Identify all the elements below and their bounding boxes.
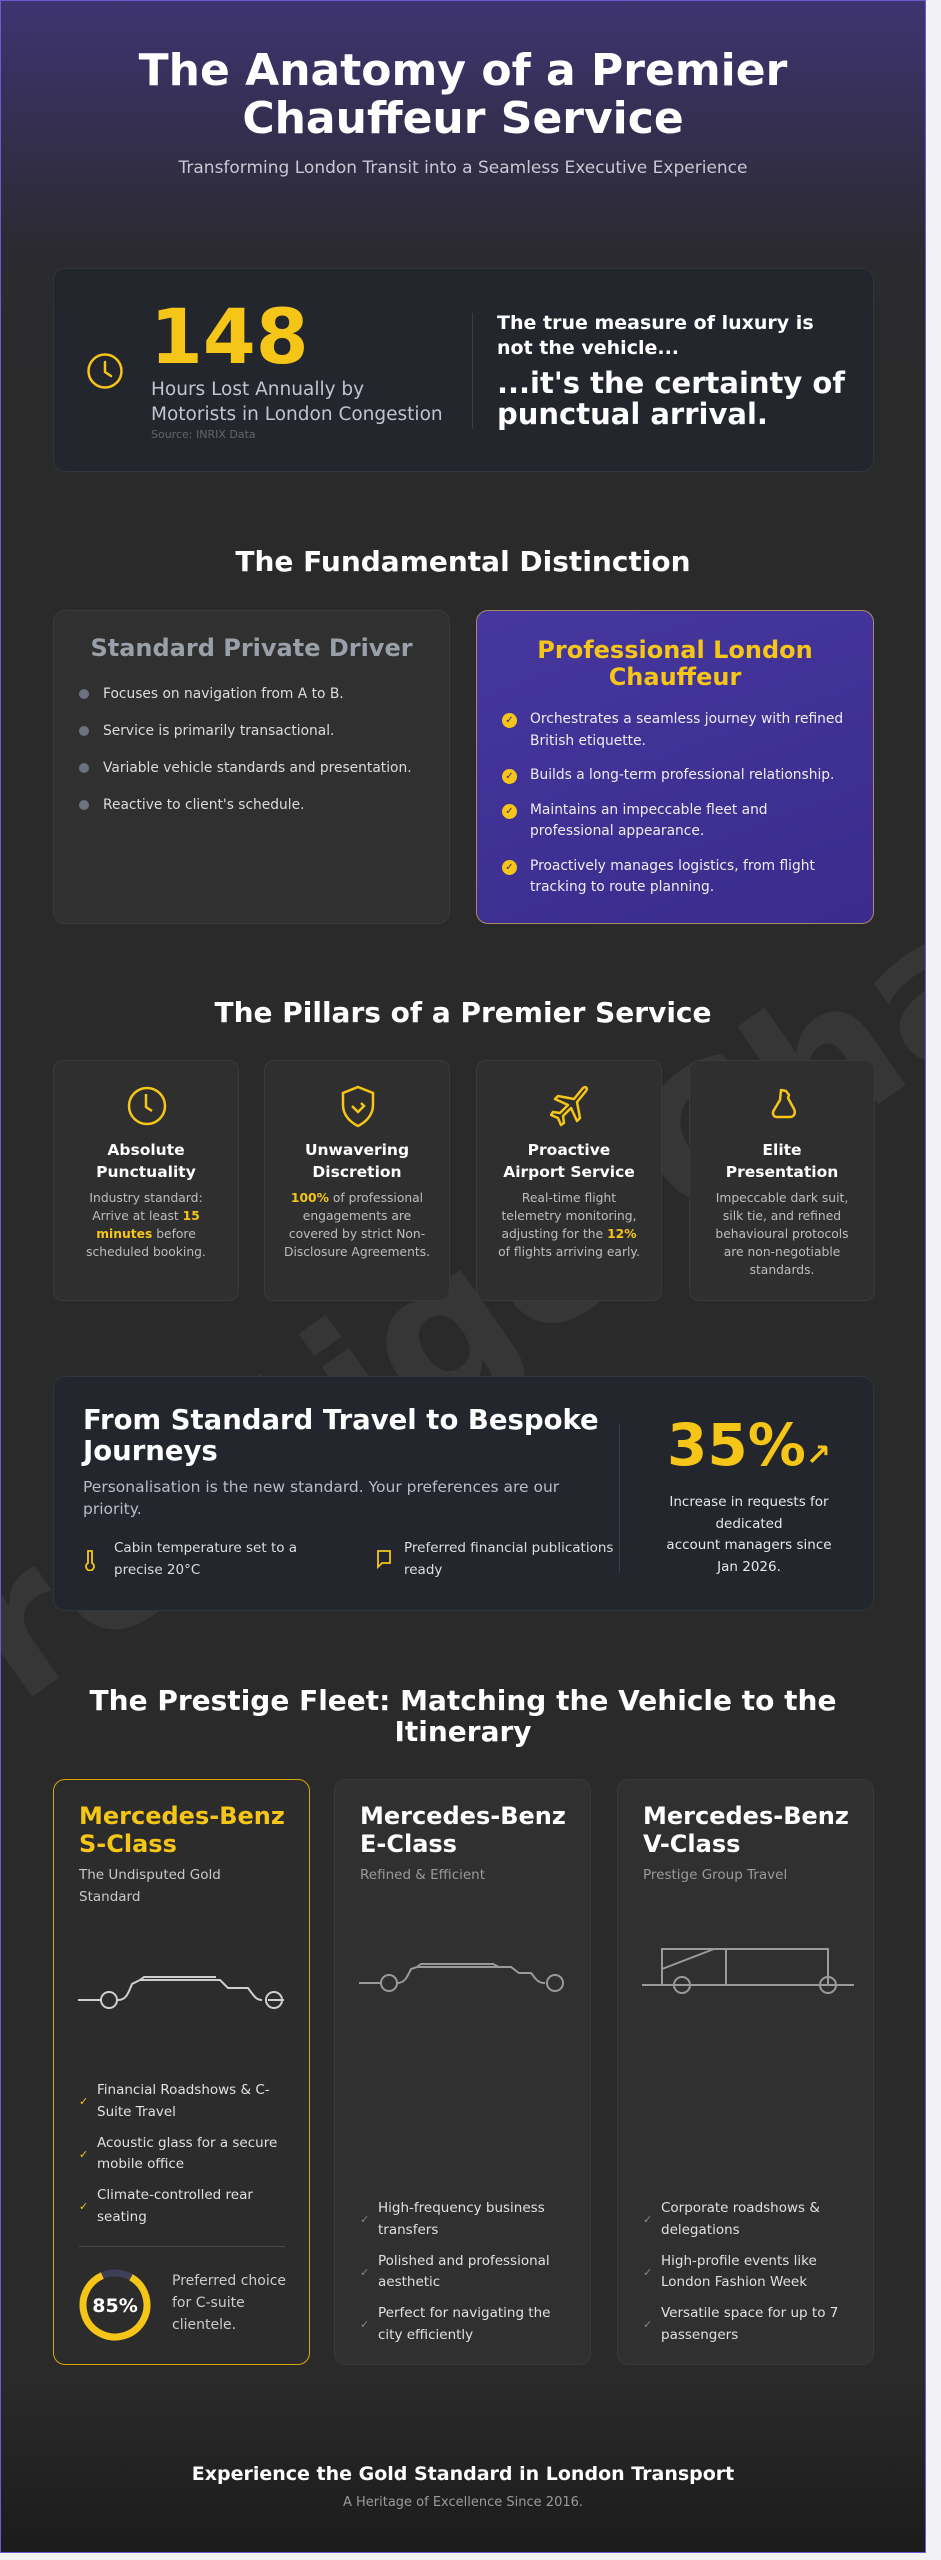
stat: 35%: 35%↗ — [667, 1411, 831, 1479]
panel: professional chauffeur: Maintains an impeccable fleet and — [530, 802, 768, 818]
pillar: presentation: Impeccable dark suit, silk tie, and refined behavioural protocols are non-negotiable standards. — [715, 1191, 849, 1277]
stat: 35%: account managers since — [666, 1537, 832, 1553]
stat label — [151, 379, 443, 425]
panel: standard driver: Standard Private Driver — [90, 634, 413, 662]
fleet card: S-Class: Climate-controlled rear seating — [97, 2187, 253, 2224]
stat: 35%: Jan 2026. — [717, 1558, 781, 1574]
footer: A Heritage of Excellence Since 2016. — [343, 2495, 583, 2510]
fleet card: S-Class: Mercedes-Benz — [79, 1802, 285, 1830]
feature: publications — [377, 1540, 613, 1578]
pillar: punctuality — [53, 1060, 239, 1301]
fleet card: E-Class: Polished and professional aesthetic — [378, 2252, 550, 2290]
panel: bespoke — [53, 1376, 874, 1611]
panel: professional chauffeur: professional appearance. — [530, 823, 704, 839]
fleet card: V-Class: High-profile events like London Fashion Week — [661, 2252, 817, 2290]
quote: ...it's the certainty of punctual arrival. — [497, 366, 845, 431]
feature: temperature — [85, 1540, 297, 1578]
panel: professional chauffeur: ✓ — [505, 715, 514, 726]
fleet card: V-Class: Versatile space for up to 7 passengers — [661, 2305, 838, 2342]
icon: clock — [128, 1086, 166, 1126]
fleet card: V-Class: Mercedes-Benz — [643, 1802, 849, 1830]
pillar: discretion: Discretion — [312, 1163, 402, 1181]
heading: fleet: The Prestige Fleet: Matching the Vehicle to the — [90, 1684, 836, 1717]
stat label: Motorists in London Congestion — [151, 404, 443, 425]
fleet card: E-Class: High-frequency business transfers — [378, 2200, 545, 2238]
donut: 85%: 85% — [92, 2295, 138, 2317]
fleet card: E-Class: Perfect for navigating the city efficiently — [378, 2305, 550, 2342]
bespoke title: From Standard Travel to Bespoke Journeys — [83, 1404, 599, 1467]
panel: professional chauffeur: Proactively manages logistics, from flight tracking to route planning. — [530, 858, 815, 895]
panel: professional chauffeur: Builds a long-term professional relationship. — [530, 767, 834, 783]
fleet card: V-Class — [617, 1779, 874, 2365]
icon: clock — [87, 353, 123, 389]
bespoke subtitle: Personalisation is the new standard. Your preferences are our priority. — [83, 1478, 559, 1518]
icon: shield — [342, 1086, 374, 1128]
panel: standard driver — [53, 610, 450, 924]
donut: 85% — [79, 2270, 151, 2341]
heading: fleet — [90, 1684, 836, 1748]
feature: publications: ready — [404, 1562, 442, 1578]
heading: fleet: Itinerary — [394, 1715, 532, 1748]
icon: sedan — [359, 1963, 564, 1992]
title: Chauffeur Service — [242, 93, 684, 144]
quote — [497, 312, 846, 431]
stat label: Hours Lost Annually by — [151, 379, 364, 400]
heading: distinction: The Fundamental Distinction — [235, 545, 691, 578]
stat: 35%: dedicated — [715, 1516, 783, 1532]
icon: van — [642, 1948, 854, 1994]
icon: sedan — [78, 1976, 284, 2009]
feature: temperature: precise 20°C — [114, 1562, 200, 1578]
title — [138, 45, 788, 144]
stat card — [53, 268, 874, 472]
panel: professional chauffeur: Professional London — [537, 636, 813, 664]
panel: standard driver: Service is primarily transactional. — [103, 723, 334, 739]
panel: standard driver: Reactive to client's schedule. — [103, 797, 304, 813]
pillar: punctuality: Punctuality — [96, 1163, 196, 1181]
pillar: airport: Airport Service — [503, 1163, 635, 1181]
pillar: airport — [476, 1060, 662, 1301]
fleet card: E-Class: Refined & Efficient — [360, 1867, 485, 1883]
fleet card: E-Class — [334, 1779, 591, 2365]
panel: professional chauffeur: ✓ — [505, 771, 514, 782]
fleet card: S-Class: Acoustic glass for a secure mobile office — [97, 2134, 277, 2172]
fleet card: S-Class: The Undisputed Gold — [79, 1867, 221, 1883]
pillar: discretion: 100% of professional engagements are covered by strict Non-Disclosure Agreements. — [284, 1191, 430, 1259]
pillar: presentation: Elite — [762, 1141, 802, 1159]
panel: professional chauffeur — [476, 610, 874, 924]
fleet card: V-Class: Corporate roadshows & delegations — [661, 2200, 820, 2238]
icon: plane — [550, 1086, 588, 1126]
stat number: 148 — [150, 292, 309, 381]
fleet card: S-Class: Financial Roadshows & C-Suite Travel — [97, 2082, 270, 2120]
pillar: punctuality: Industry standard: Arrive at least 15 minutes before scheduled booking. — [86, 1191, 206, 1259]
stat: 35% — [666, 1411, 832, 1574]
fleet card: V-Class: Prestige Group Travel — [643, 1867, 787, 1883]
pillar: presentation — [689, 1060, 875, 1301]
panel: professional chauffeur: ✓ — [505, 806, 514, 816]
fleet card: S-Class: Standard — [79, 1889, 140, 1905]
pillar: discretion: Unwavering — [305, 1141, 409, 1159]
panel: standard driver: Focuses on navigation from A to B. — [103, 686, 344, 702]
fleet card: S-Class: clientele. — [172, 2317, 236, 2333]
fleet card: E-Class: E-Class — [360, 1830, 457, 1858]
pillar: airport: Real-time flight telemetry monitoring, adjusting for the 12% of flights arriving early. — [498, 1191, 640, 1259]
stat: 35%: Increase in requests for — [669, 1494, 829, 1510]
source: Source: INRIX Data — [151, 428, 256, 441]
quote: not the vehicle... — [497, 337, 679, 359]
title: The Anatomy of a Premier — [139, 45, 787, 96]
fleet card: S-Class: for C-suite — [172, 2295, 245, 2311]
feature: publications: Preferred financial publications — [404, 1540, 613, 1556]
feature: temperature: Cabin temperature set to a — [114, 1540, 297, 1556]
panel: professional chauffeur: Orchestrates a seamless journey with refined British etiquette. — [530, 711, 843, 748]
fleet card: S-Class: S-Class — [79, 1830, 177, 1858]
icon: tie — [772, 1088, 796, 1118]
panel: standard driver: Variable vehicle standards and presentation. — [103, 760, 412, 776]
heading: pillars: The Pillars of a Premier Service — [214, 996, 712, 1029]
panel: professional chauffeur: Chauffeur — [609, 663, 741, 691]
footer — [192, 2463, 734, 2510]
fleet card: S-Class — [53, 1779, 310, 2365]
fleet card: V-Class: V-Class — [643, 1830, 740, 1858]
fleet card: E-Class: Mercedes-Benz — [360, 1802, 566, 1830]
subtitle: Transforming London Transit into a Seamless Executive Experience — [178, 158, 747, 178]
panel: professional chauffeur: ✓ — [505, 862, 514, 872]
footer: Experience the Gold Standard in London Transport — [192, 2463, 734, 2485]
quote: The true measure of luxury is — [497, 312, 814, 334]
pillar: presentation: Presentation — [726, 1163, 838, 1181]
fleet card: S-Class: Preferred choice — [172, 2273, 286, 2289]
pillar: airport: Proactive — [528, 1141, 610, 1159]
pillar: punctuality: Absolute — [107, 1141, 185, 1159]
pillar: discretion — [264, 1060, 450, 1301]
